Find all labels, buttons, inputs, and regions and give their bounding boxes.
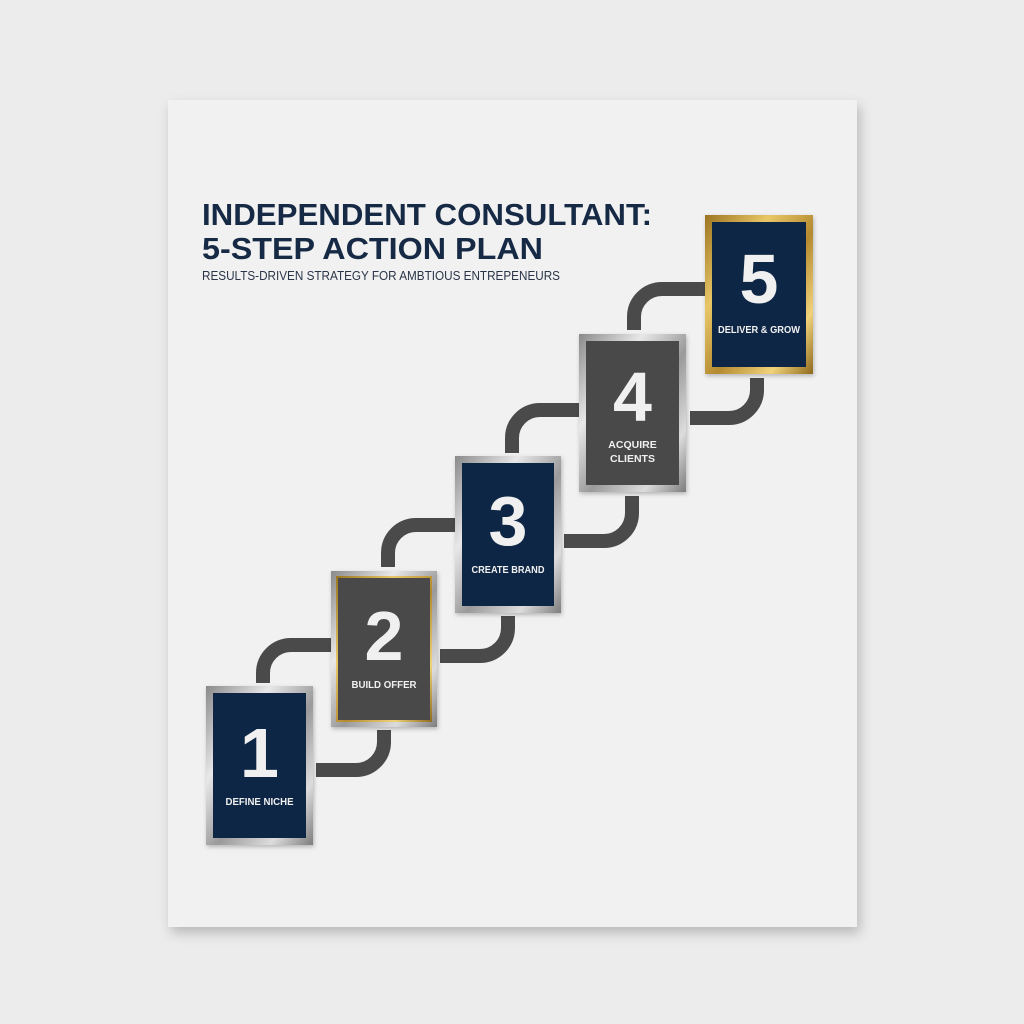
card 3 — [455, 456, 561, 613]
title: INDEPENDENT CONSULTANT: — [202, 197, 652, 232]
card 2: 2 — [365, 597, 403, 675]
connectors — [263, 289, 757, 770]
subtitle: RESULTS-DRIVEN STRATEGY FOR AMBTIOUS ENTREPENEURS — [202, 268, 560, 283]
card 4: ACQUIRE — [608, 439, 657, 451]
card 4 — [579, 334, 686, 492]
card 2 — [331, 571, 437, 727]
title: 5-STEP ACTION PLAN — [202, 231, 543, 266]
card 4: 4 — [613, 358, 652, 436]
card 3: 3 — [489, 482, 527, 560]
card 5 — [705, 215, 813, 374]
card 4: CLIENTS — [610, 453, 655, 465]
title — [202, 197, 652, 266]
card 2: BUILD OFFER — [352, 679, 417, 691]
card 1 — [206, 686, 313, 845]
card 3: CREATE BRAND — [472, 564, 545, 576]
paper sheet — [168, 100, 857, 927]
card 1: DEFINE NICHE — [226, 796, 294, 808]
card 5: 5 — [740, 240, 778, 318]
card 1: 1 — [240, 714, 279, 792]
card 5: DELIVER & GROW — [718, 324, 800, 336]
